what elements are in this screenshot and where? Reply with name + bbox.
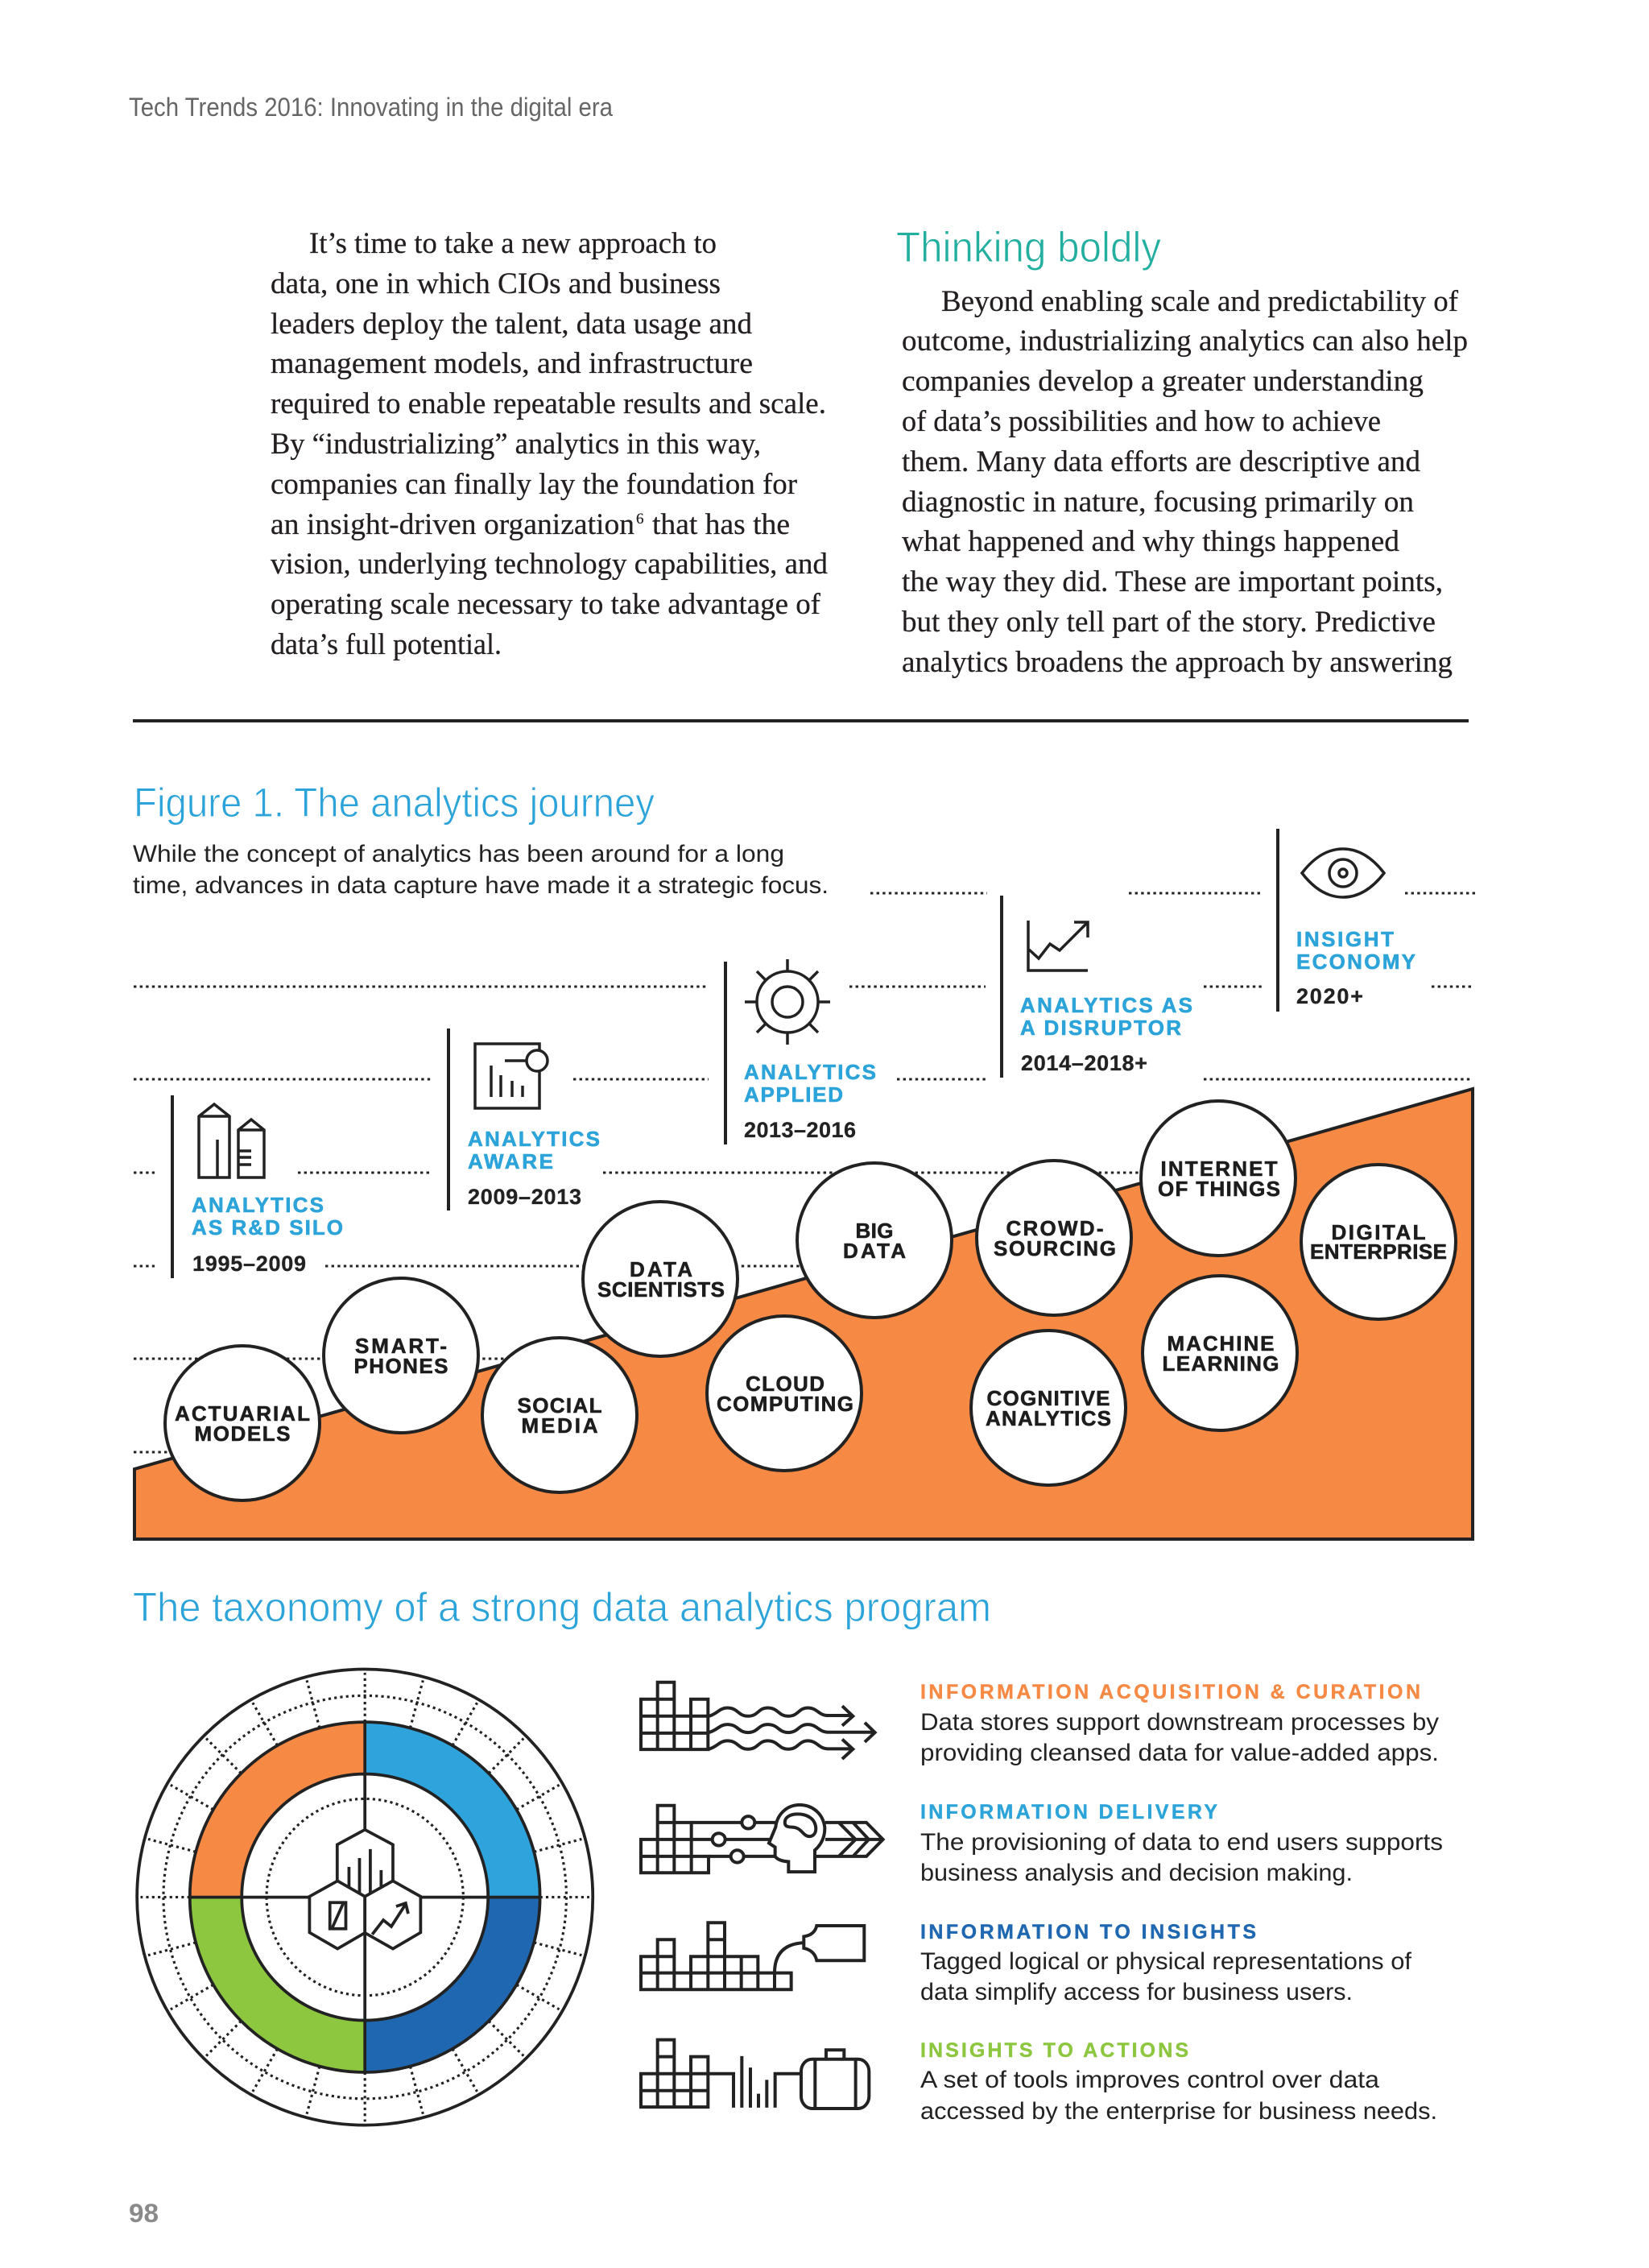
icon: three hexagons — [309, 1830, 420, 1949]
text block: right column body copy: Beyond enabling scale and predictability of — [941, 285, 1459, 318]
legend item: insights to actions: accessed by the enterprise for business needs. — [920, 2098, 1437, 2125]
milestone: analytics as R&D silo: ANALYTICS — [192, 1193, 324, 1217]
milestone: analytics as R&D silo — [172, 1095, 343, 1278]
bubble: digital enterprise: DIGITAL — [1332, 1220, 1426, 1244]
milestone: analytics applied: ANALYTICS — [744, 1060, 876, 1084]
text block: left column body copy — [271, 227, 828, 661]
milestone: insight economy — [1278, 829, 1415, 1012]
bubble: cognitive analytics — [971, 1331, 1126, 1485]
bubble: smartphones — [324, 1278, 478, 1433]
milestone: analytics as R&D silo: 1995–2009 — [192, 1252, 306, 1276]
milestone: analytics as a disruptor: A DISRUPTOR — [1020, 1016, 1181, 1040]
milestone: insight economy: ECONOMY — [1296, 950, 1415, 974]
icon: rising chart — [1028, 921, 1088, 971]
bubble: big data: DATA — [843, 1239, 906, 1263]
bubble: machine learning: LEARNING — [1163, 1351, 1279, 1376]
icon: delivery, data through head — [641, 1805, 883, 1873]
text block: left column body copy: data, one in which CIOs and business — [271, 267, 721, 300]
bubble: machine learning: MACHINE — [1168, 1331, 1274, 1355]
text block: left column body copy: data’s full potential. — [271, 628, 502, 661]
bubble: cloud computing: COMPUTING — [717, 1392, 853, 1416]
bubble: smartphones: PHONES — [354, 1354, 448, 1378]
legend item: insights to actions: INSIGHTS TO ACTIONS — [920, 2039, 1188, 2062]
milestone: analytics aware: ANALYTICS — [468, 1127, 600, 1151]
text block: left column body copy: It’s time to take a new approach to — [309, 227, 717, 260]
milestone: analytics aware — [448, 1028, 600, 1211]
running header: Tech Trends 2016: Innovating in the digital era — [129, 93, 613, 122]
milestone: analytics as a disruptor: 2014–2018+ — [1021, 1051, 1147, 1075]
milestone: analytics applied: APPLIED — [744, 1082, 843, 1107]
legend item: information acquisition and curation — [920, 1681, 1439, 1766]
heading: taxonomy: The taxonomy of a strong data analytics program — [133, 1584, 991, 1630]
text block: right column body copy: outcome, industrializing analytics can also help — [902, 325, 1468, 358]
text block: left column body copy: By “industrializing” analytics in this way, — [271, 428, 761, 461]
icon: actions, briefcase — [641, 2040, 869, 2109]
text block: right column body copy: diagnostic in nature, focusing primarily on — [902, 486, 1414, 519]
diagram: taxonomy wheel — [137, 1670, 593, 2125]
bubble: actuarial models — [165, 1346, 320, 1500]
icon: report — [475, 1044, 548, 1108]
legend item: information delivery: The provisioning of data to end users supports — [920, 1829, 1443, 1856]
legend item: information to insights: data simplify access for business users. — [920, 1979, 1353, 2005]
milestone: analytics as a disruptor — [1002, 896, 1192, 1078]
text block: left column body copy: an insight-driven organization — [271, 508, 634, 541]
text block: right column body copy: analytics broadens the approach by answering — [902, 646, 1453, 679]
text block: left column body copy: required to enable repeatable results and scale. — [271, 387, 826, 420]
text block: left column body copy: vision, underlying technology capabilities, and — [271, 548, 828, 581]
bubble: digital enterprise: ENTERPRISE — [1310, 1240, 1447, 1264]
ring segment: acquisition (orange) — [190, 1722, 365, 1898]
milestone: insight economy: INSIGHT — [1296, 927, 1394, 951]
bubble: big data — [797, 1163, 952, 1318]
bubble: social media: MEDIA — [522, 1413, 598, 1438]
bubble: cognitive analytics: COGNITIVE — [987, 1386, 1110, 1410]
chart: analytics journey — [134, 829, 1476, 1539]
icon: gear — [745, 959, 830, 1045]
text block: left column body copy: that has the — [652, 508, 790, 541]
milestone: analytics as R&D silo: AS R&D SILO — [192, 1215, 343, 1240]
ring segment: to actions (green) — [190, 1898, 365, 2072]
legend item: information acquisition and curation: Data stores support downstream processes by — [920, 1709, 1439, 1736]
text block: right column body copy: but they only tell part of the story. Predictive — [902, 606, 1436, 639]
text block: figure intro: While the concept of analytics has been around for a long — [133, 841, 784, 867]
legend item: information to insights: Tagged logical or physical representations of — [920, 1948, 1412, 1975]
bubble: cloud computing — [707, 1316, 862, 1471]
bubble: actuarial models: MODELS — [195, 1422, 290, 1446]
text block: left column body copy: management models, and infrastructure — [271, 347, 753, 380]
bubble: crowdsourcing — [977, 1161, 1131, 1315]
text block: right column body copy — [902, 285, 1468, 679]
legend item: information acquisition and curation: providing cleansed data for value-added apps. — [920, 1740, 1439, 1766]
legend item: information acquisition and curation: INFORMATION ACQUISITION & CURATION — [920, 1681, 1420, 1703]
ring segment: to insights (dark blue) — [365, 1898, 540, 2072]
bubble: crowdsourcing: CROWD- — [1006, 1216, 1103, 1240]
milestone: analytics applied — [725, 959, 876, 1144]
bubble: data scientists — [583, 1202, 738, 1356]
text block: right column body copy: the way they did. These are important points, — [902, 565, 1443, 598]
bubble: data scientists: SCIENTISTS — [597, 1277, 725, 1302]
page number: 98 — [129, 2199, 159, 2228]
icon: silos — [199, 1104, 264, 1177]
bubble: social media — [482, 1338, 637, 1492]
bubble: cognitive analytics: ANALYTICS — [986, 1406, 1111, 1430]
milestone: insight economy: 2020+ — [1296, 984, 1363, 1008]
bubble: actuarial models: ACTUARIAL — [175, 1401, 310, 1426]
text block: right column body copy: of data’s possibilities and how to achieve — [902, 405, 1381, 438]
bubble: machine learning — [1143, 1276, 1297, 1430]
text block: left column body copy: operating scale necessary to take advantage of — [271, 588, 821, 621]
bubble: data scientists: DATA — [630, 1257, 692, 1281]
orange growth area — [134, 1089, 1473, 1539]
legend item: information delivery: business analysis and decision making. — [920, 1860, 1353, 1886]
legend item: insights to actions — [920, 2039, 1437, 2125]
legend item: information delivery: INFORMATION DELIVERY — [920, 1801, 1217, 1823]
bubble: social media: SOCIAL — [517, 1393, 602, 1418]
heading: Thinking boldly: Thinking boldly — [896, 224, 1161, 271]
ring segment: delivery (blue) — [365, 1722, 540, 1898]
icon: acquisition, data flowing out — [641, 1682, 875, 1759]
text block: figure intro — [133, 841, 829, 899]
milestone: analytics as a disruptor: ANALYTICS AS — [1020, 993, 1192, 1017]
text block: right column body copy: companies develop a greater understanding — [902, 365, 1424, 398]
milestone: analytics aware: 2009–2013 — [468, 1185, 581, 1209]
legend item: information delivery — [920, 1801, 1443, 1886]
text block: left column body copy: 6 — [636, 511, 644, 528]
heading: Figure 1: Figure 1. The analytics journey — [134, 780, 655, 826]
bubble: internet of things: INTERNET — [1161, 1157, 1278, 1181]
legend item: information to insights: INFORMATION TO INSIGHTS — [920, 1921, 1256, 1943]
text block: left column body copy: companies can finally lay the foundation for — [271, 468, 797, 501]
bubble: big data: BIG — [855, 1219, 894, 1243]
icon: eye — [1302, 849, 1384, 897]
text block: left column body copy: leaders deploy the talent, data usage and — [271, 308, 752, 341]
icon: insights, tagged data — [641, 1922, 864, 1989]
bubble: internet of things: OF THINGS — [1158, 1177, 1280, 1201]
bubble: smartphones: SMART- — [355, 1334, 447, 1358]
legend item: insights to actions: A set of tools improves control over data — [920, 2067, 1379, 2093]
bubble: crowdsourcing: SOURCING — [994, 1236, 1116, 1260]
bubble: cloud computing: CLOUD — [746, 1372, 824, 1396]
milestone: analytics applied: 2013–2016 — [744, 1118, 856, 1142]
text block: right column body copy: them. Many data efforts are descriptive and — [902, 445, 1420, 478]
bubble: digital enterprise — [1301, 1165, 1456, 1319]
bubble: internet of things — [1141, 1101, 1296, 1256]
legend item: information to insights — [920, 1921, 1412, 2005]
milestone: analytics aware: AWARE — [468, 1149, 553, 1173]
text block: right column body copy: what happened and why things happened — [902, 525, 1400, 558]
text block: figure intro: time, advances in data capture have made it a strategic focus. — [133, 872, 829, 899]
